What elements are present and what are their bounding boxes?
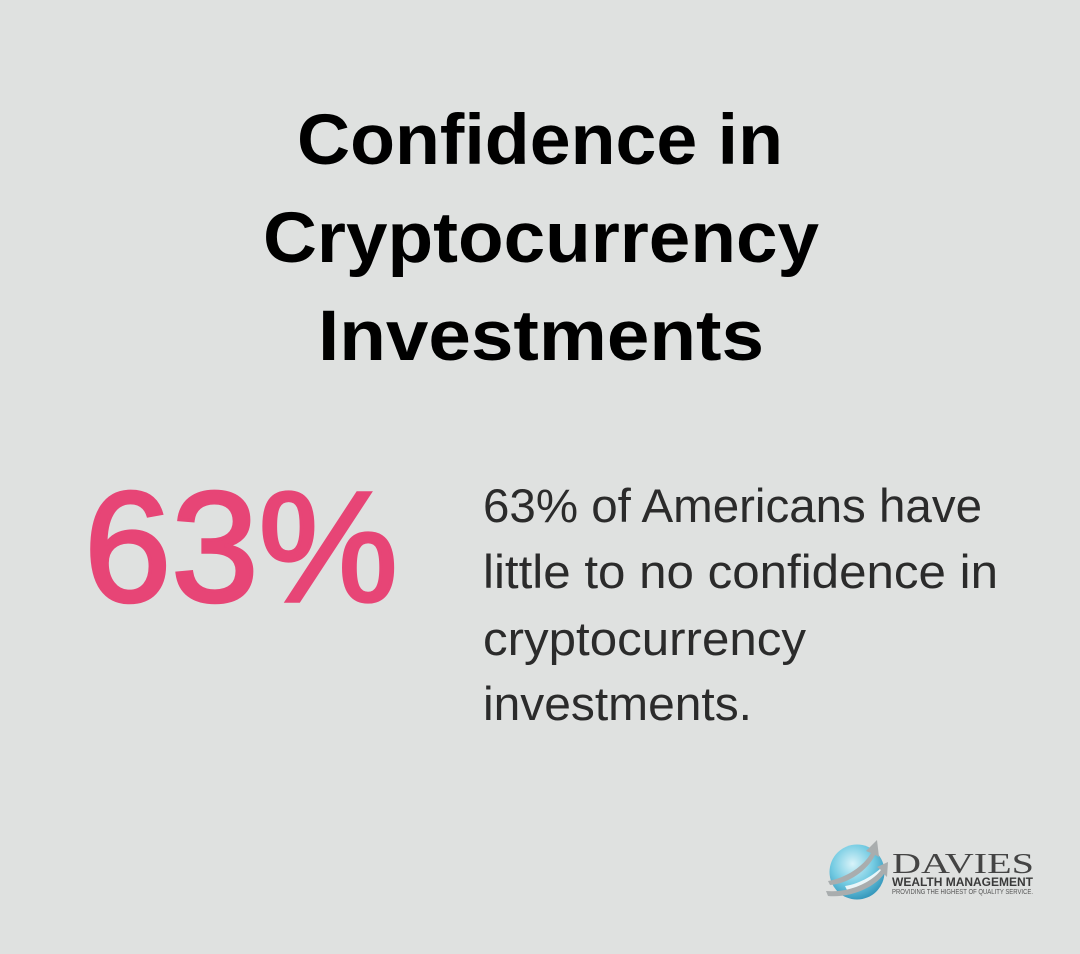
logo: Davies Wealth Management bbox=[826, 840, 1034, 900]
title: Confidence in bbox=[297, 101, 783, 180]
big statistic: 63%: 63% bbox=[84, 460, 398, 635]
description text: little to no confidence in bbox=[483, 545, 998, 598]
description text bbox=[483, 479, 998, 730]
description text: 63% of Americans have bbox=[483, 479, 982, 532]
title: Cryptocurrency bbox=[263, 199, 820, 278]
title bbox=[263, 101, 820, 376]
logo tagline: PROVIDING THE HIGHEST OF QUALITY SERVICE. bbox=[892, 889, 1033, 896]
icon: globe with arrows bbox=[826, 840, 888, 900]
title: Investments bbox=[318, 297, 764, 376]
logo subtitle: WEALTH MANAGEMENT bbox=[892, 875, 1034, 889]
description text: cryptocurrency bbox=[483, 612, 807, 665]
logo wordmark: DAVIES bbox=[892, 848, 1034, 880]
description text: investments. bbox=[483, 677, 752, 730]
